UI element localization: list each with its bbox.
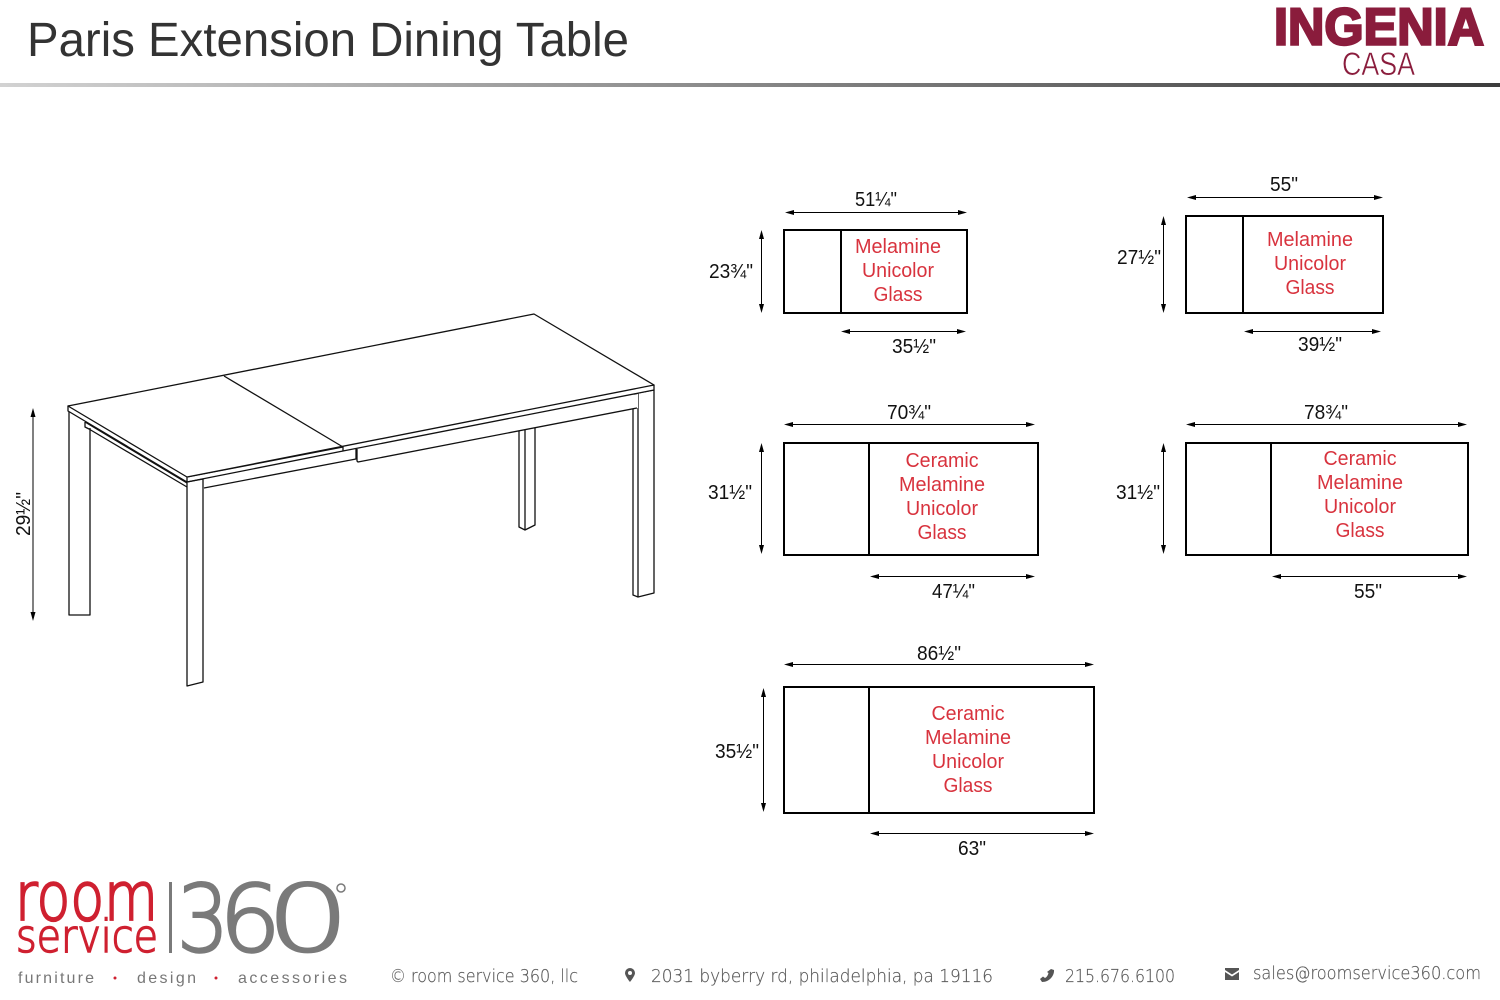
dimensions: 51¼" — [855, 189, 897, 211]
dimensions: 35½" — [892, 336, 936, 358]
footer: phone — [1040, 966, 1175, 987]
title: Paris Extension Dining Table — [27, 14, 629, 67]
footer: address — [625, 966, 993, 987]
material list: Melamine — [1317, 472, 1403, 494]
dimensions: 31½" — [1116, 482, 1160, 504]
diagram: 51¼ × 23¾ — [709, 189, 967, 358]
material list: Glass — [874, 284, 922, 306]
logo wordmark: INGENIA — [1274, 0, 1484, 56]
dimensions: 35½" — [715, 741, 759, 763]
material list: Melamine — [1267, 229, 1353, 251]
right leg — [633, 390, 654, 597]
material list: Unicolor — [932, 751, 1004, 773]
footer: email — [1225, 963, 1481, 984]
diagram: 78¾ × 31½ — [1116, 402, 1468, 603]
material list: Melamine — [925, 727, 1011, 749]
logo subtitle: CASA — [1342, 46, 1416, 82]
material list: Melamine — [855, 236, 941, 258]
logo text: three: 3 — [177, 865, 229, 973]
outline — [784, 443, 1038, 555]
logo divider — [169, 882, 172, 953]
dimensions: 27½" — [1117, 247, 1161, 269]
dimensions — [715, 643, 1085, 860]
logo text: zero: 0 — [266, 865, 350, 973]
material list: Unicolor — [1324, 496, 1396, 518]
material list: Ceramic — [932, 703, 1004, 725]
material list: Glass — [1336, 520, 1384, 542]
diagram: 55 × 27½ — [1117, 174, 1383, 356]
material list — [1267, 229, 1353, 299]
dimensions: 39½" — [1298, 334, 1342, 356]
dimensions — [709, 189, 958, 358]
table illustration — [68, 314, 654, 686]
material list: Glass — [1286, 277, 1334, 299]
dimensions: 47¼" — [932, 581, 975, 603]
outline — [1186, 216, 1383, 313]
material list: Glass — [918, 522, 966, 544]
tagline — [18, 970, 347, 987]
outline — [1186, 443, 1468, 555]
material list: Glass — [944, 775, 992, 797]
material list — [1317, 448, 1403, 542]
logo text: service: service — [16, 910, 158, 963]
material list: Ceramic — [1324, 448, 1396, 470]
table top edge — [68, 385, 654, 482]
tagline: furniture — [18, 970, 94, 987]
logo degree ring — [337, 884, 345, 892]
logo text: six: 6 — [219, 865, 281, 973]
tagline: design — [137, 970, 196, 987]
icon: envelope — [1225, 968, 1239, 980]
tagline: accessories — [238, 970, 347, 987]
material list: Ceramic — [906, 450, 978, 472]
logo text: room: room — [15, 858, 158, 936]
material list: Unicolor — [1274, 253, 1346, 275]
dimensions: 23¾" — [709, 261, 753, 283]
footer: copyright: © room service 360, llc — [390, 966, 578, 987]
icon: phone — [1040, 969, 1054, 982]
icon: map pin — [625, 968, 635, 982]
front leg — [187, 479, 203, 686]
outline — [784, 230, 967, 313]
dimensions: 70¾" — [887, 402, 931, 424]
dimension: table height: 29½" — [13, 492, 35, 536]
extension seam — [224, 376, 343, 447]
long side apron — [357, 394, 638, 462]
back-left leg — [69, 411, 90, 615]
logo: Ingenia Casa — [1274, 0, 1484, 82]
outline — [784, 687, 1094, 813]
dimensions: 55" — [1270, 174, 1298, 196]
short side apron — [85, 422, 187, 487]
phone text: 215.676.6100 — [1065, 966, 1175, 987]
header rule — [0, 83, 1500, 87]
dimensions — [1117, 174, 1374, 356]
dimensions: 63" — [958, 838, 986, 860]
dimensions: 86½" — [917, 643, 961, 665]
middle back leg — [519, 428, 535, 530]
material list — [925, 703, 1011, 797]
logo: room service 360 — [15, 858, 350, 987]
diagram: 70¾ × 31½ — [708, 402, 1038, 603]
dimensions — [708, 402, 1026, 603]
material list: Unicolor — [906, 498, 978, 520]
table top surface — [68, 314, 654, 477]
email text: sales@roomservice360.com — [1253, 963, 1481, 984]
material list: Melamine — [899, 474, 985, 496]
material list: Unicolor — [862, 260, 934, 282]
material list — [855, 236, 941, 306]
material list — [899, 450, 985, 544]
address text: 2031 byberry rd, philadelphia, pa 19116 — [651, 966, 993, 987]
dimensions — [1116, 402, 1458, 603]
dimensions: 31½" — [708, 482, 752, 504]
dimensions: 55" — [1354, 581, 1382, 603]
diagram: 86½ × 35½ — [715, 643, 1094, 860]
dimensions: 78¾" — [1304, 402, 1348, 424]
